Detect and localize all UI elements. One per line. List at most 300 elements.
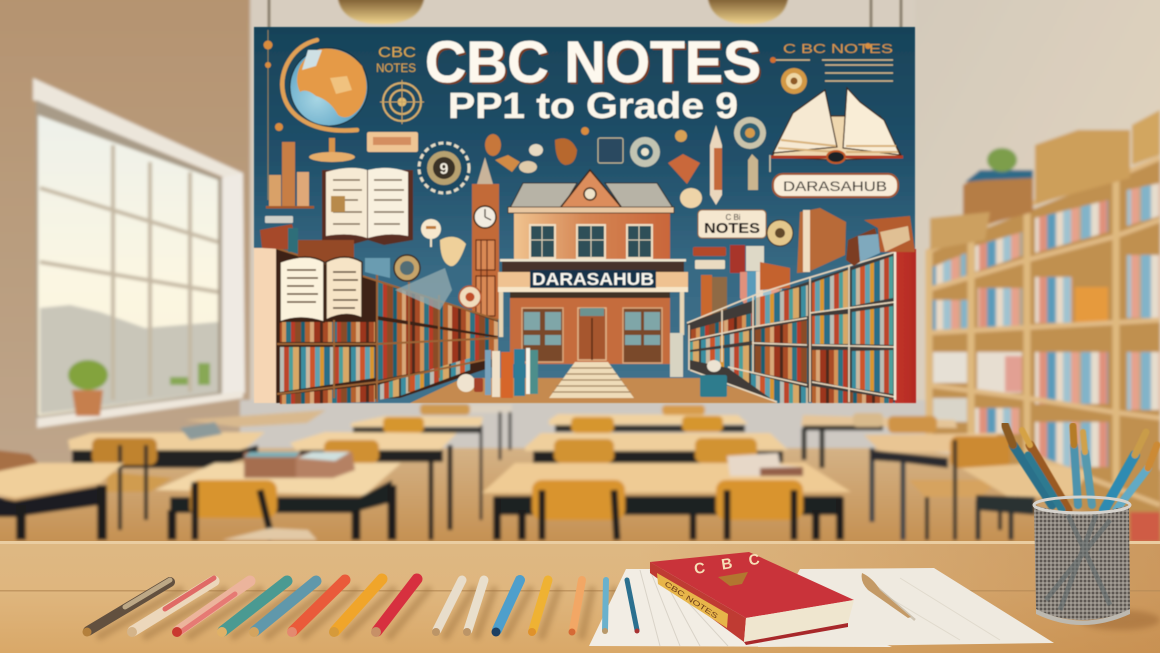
brush blue B — [1085, 452, 1092, 505]
label: notes sign: C Bi — [725, 213, 741, 222]
table groove — [0, 590, 1160, 592]
desk left — [68, 432, 265, 450]
title line two shadow: PP1 to Grade 9 — [449, 86, 739, 127]
cover title: CBC — [693, 551, 761, 578]
door — [578, 308, 606, 360]
chair — [324, 440, 379, 463]
rule end dot — [770, 57, 776, 63]
icon: globe — [282, 40, 368, 162]
shelf back — [927, 158, 1160, 545]
title line two: PP1 to Grade 9 — [448, 85, 738, 126]
window frame — [36, 100, 222, 424]
books on left desk — [0, 450, 38, 472]
apron — [0, 486, 100, 517]
building — [498, 170, 688, 398]
ceiling lamps — [269, 0, 901, 30]
icon: small item on floor — [457, 374, 483, 392]
row 2 right — [1035, 277, 1072, 323]
shelf books upper far — [1127, 183, 1160, 226]
door centre line — [591, 318, 593, 360]
book stack centre — [485, 348, 538, 398]
hanging wires — [269, 0, 901, 30]
pen 12 — [528, 580, 548, 636]
right sheet lines — [868, 578, 1000, 640]
title — [425, 30, 763, 127]
pen 15 — [627, 580, 640, 634]
chair seat — [222, 528, 317, 540]
balcony base — [498, 287, 688, 292]
cornice — [508, 207, 674, 213]
icon: target — [380, 80, 424, 124]
globe stem — [329, 138, 335, 156]
case body — [276, 248, 498, 403]
heading rule lines — [772, 60, 893, 81]
columns — [501, 292, 682, 337]
label: darasahub banner: DARASAHUB — [783, 178, 887, 194]
cup rim — [1034, 497, 1130, 513]
red book — [650, 551, 854, 645]
mesh cup body — [1034, 505, 1130, 620]
book stack — [244, 452, 300, 478]
books right upper far — [852, 256, 893, 306]
tower panels — [476, 240, 495, 316]
brush blue A tip — [1073, 426, 1074, 445]
title shadow: CBC NOTES — [427, 32, 763, 97]
icon: tag label — [367, 132, 418, 152]
icon: coin — [734, 117, 766, 149]
apron — [300, 450, 443, 462]
paper sheets — [589, 568, 1054, 647]
brush right B — [1116, 468, 1148, 510]
books mid upper — [755, 285, 808, 326]
globe sphere — [290, 48, 368, 126]
chair legs — [927, 440, 1000, 540]
lower back wall — [240, 400, 940, 460]
label: darasahub banner — [773, 174, 898, 197]
window glass — [38, 115, 218, 416]
back cover edge — [744, 623, 848, 645]
pen 4 — [217, 581, 287, 637]
books rear shelf — [378, 280, 498, 336]
pencil shadow — [866, 578, 915, 620]
orange box — [1075, 287, 1108, 322]
apron — [72, 445, 258, 468]
desk centre — [525, 433, 788, 451]
icon: open book top left — [322, 168, 413, 245]
brush B tip — [1083, 432, 1085, 452]
apron — [533, 451, 783, 463]
book pages — [803, 210, 810, 272]
window bars — [530, 225, 652, 258]
pens on table — [82, 578, 640, 637]
desk apron — [353, 427, 481, 433]
pen shadows — [100, 590, 644, 636]
right bookshelf — [927, 110, 1160, 545]
books mid right — [378, 320, 498, 380]
front table — [0, 541, 1160, 653]
row 3 centre — [977, 352, 1022, 393]
dotted deco left — [267, 30, 269, 200]
books right mid far — [852, 306, 893, 345]
holder shadow — [1080, 610, 1160, 630]
book cover — [650, 552, 854, 618]
row 4 right — [1035, 422, 1108, 467]
book pages — [744, 600, 854, 642]
books behind right case — [701, 245, 790, 322]
big books above right case — [797, 208, 915, 273]
table edge highlight — [0, 541, 1160, 544]
banner plate — [530, 270, 656, 288]
chair — [682, 416, 723, 432]
continent highlight — [330, 76, 352, 94]
shelf books top left — [930, 253, 966, 287]
icon: clock tower — [472, 157, 499, 319]
red side panel — [895, 249, 916, 403]
poster background — [254, 27, 915, 403]
deco dots — [264, 40, 871, 135]
desk row 3 — [351, 416, 483, 427]
brush right B tip — [1148, 445, 1157, 468]
pen 9 — [432, 580, 462, 636]
red cover — [771, 156, 903, 158]
left roof — [510, 183, 577, 208]
spire — [477, 157, 493, 184]
label: notes sign — [698, 210, 766, 238]
books row left top — [690, 313, 752, 340]
blue book — [858, 234, 880, 262]
upper windows — [530, 225, 652, 258]
books upper left — [280, 322, 375, 342]
chair — [695, 438, 757, 463]
row 2 far — [1127, 255, 1160, 318]
books bottom — [812, 386, 893, 403]
brush left tip — [1005, 425, 1013, 445]
middle row desks — [68, 422, 1010, 540]
icon: pen — [710, 125, 722, 205]
icon: coin beside sign — [767, 220, 793, 246]
icon: numbered medal: 9 — [440, 161, 449, 178]
pile top — [864, 216, 915, 252]
chair — [571, 417, 614, 433]
pen 5 — [249, 581, 316, 637]
book pile — [963, 170, 1033, 230]
books right mid — [812, 314, 848, 344]
chair back — [190, 480, 277, 518]
globe base — [309, 152, 355, 162]
notebook pencil — [862, 573, 915, 620]
ground windows — [522, 308, 662, 363]
tall book block — [797, 208, 846, 273]
book on desk — [180, 422, 222, 440]
small basket — [700, 375, 727, 397]
bottom books far right — [1130, 512, 1160, 542]
legs — [978, 500, 1011, 540]
pen 14 — [602, 580, 608, 634]
right roof — [605, 183, 673, 208]
desk back centre — [549, 414, 748, 425]
pen 10 — [463, 580, 484, 636]
brush teal left — [1013, 445, 1052, 505]
icon: badges — [394, 219, 481, 308]
boxes on far left — [930, 212, 990, 250]
label: small cbc notes left: NOTES — [376, 61, 416, 75]
storage boxes — [1035, 130, 1130, 205]
door top panel — [580, 308, 604, 316]
book spine — [650, 562, 746, 642]
label: small cbc notes left: CBC — [378, 44, 416, 61]
apron — [170, 480, 392, 513]
desk back right — [801, 415, 957, 428]
boards — [687, 252, 895, 402]
chair seat — [909, 480, 1000, 497]
lamp left — [338, 0, 424, 24]
right bookcase — [670, 249, 916, 403]
spine knot — [827, 151, 845, 163]
window — [33, 78, 245, 428]
chair legs — [542, 490, 617, 540]
spine text: CBC NOTES — [663, 581, 719, 621]
desk front centre — [482, 463, 851, 493]
boards — [927, 158, 1160, 505]
icon: numbered medal — [419, 143, 469, 193]
desk centre-left — [290, 432, 457, 450]
desk far left — [185, 410, 326, 427]
books lower centre — [755, 346, 808, 383]
left lined sheet — [589, 569, 892, 647]
row 3 red accent — [1005, 356, 1022, 392]
pen 11 — [492, 580, 520, 636]
page bands — [778, 140, 898, 152]
brush right A — [1104, 455, 1135, 510]
shelf boards — [276, 248, 498, 402]
brushes back — [1005, 425, 1157, 510]
icon: big open book right — [771, 88, 903, 163]
left wall — [0, 0, 260, 490]
chair — [383, 417, 424, 433]
books right upper — [812, 270, 848, 312]
desk front left top — [0, 463, 124, 498]
icon: spiral coin top right — [781, 68, 807, 94]
balcony top — [500, 259, 686, 262]
right wall — [915, 0, 1160, 470]
shelf books top centre — [975, 232, 1022, 272]
icon: note card — [598, 138, 623, 163]
books floor wedge — [728, 368, 808, 403]
pen 1 — [82, 580, 170, 636]
globe ring stand — [282, 40, 357, 131]
apron — [870, 450, 948, 468]
right sheet — [758, 568, 1054, 647]
icon: diamond shield — [668, 154, 700, 184]
chair legs — [195, 482, 272, 540]
uprights — [929, 176, 1116, 500]
row 4 left — [933, 398, 967, 422]
step lines — [552, 368, 631, 392]
books right low far — [852, 350, 893, 394]
row 3 right — [1035, 352, 1108, 404]
pile — [846, 228, 880, 266]
hills outside — [40, 305, 218, 414]
window sill — [37, 391, 243, 428]
tags — [693, 247, 726, 269]
pencil body — [862, 573, 911, 618]
row 4 centre — [975, 408, 1020, 434]
books right low — [812, 350, 848, 388]
chair — [554, 439, 614, 463]
chair — [662, 405, 705, 415]
icon: small shell — [680, 188, 702, 208]
pen 3 — [172, 581, 250, 637]
icon: bar chart books — [266, 142, 314, 208]
books mid centre — [755, 320, 808, 344]
back chair — [420, 404, 470, 415]
book pile centre — [727, 453, 803, 476]
apron — [555, 425, 745, 432]
continents — [297, 49, 367, 117]
book top 2 — [298, 452, 350, 461]
desk right 2 — [961, 463, 1090, 497]
back row desks — [185, 404, 957, 520]
chair — [888, 416, 937, 433]
label: small cbc notes right: C BC NOTES — [783, 42, 893, 56]
brush blue A — [1074, 445, 1078, 505]
chair — [532, 480, 625, 520]
plant leaves — [68, 360, 108, 390]
table right shading — [0, 541, 1160, 653]
chair seat — [107, 472, 172, 492]
apron — [976, 495, 1035, 515]
chair legs — [693, 490, 794, 540]
boxes far right — [1132, 110, 1160, 165]
icon: open book on left case — [280, 257, 362, 322]
shelf books top right — [1035, 200, 1108, 253]
base cover — [772, 116, 902, 160]
pen 2 — [127, 578, 214, 637]
gable window — [584, 188, 596, 200]
lamp right — [708, 0, 788, 24]
pen 6 — [287, 580, 345, 637]
books bottom — [280, 385, 375, 404]
pen 7 — [329, 579, 382, 637]
gable — [560, 170, 622, 208]
window panes — [524, 312, 660, 345]
books lower left — [690, 345, 752, 380]
chair faint — [853, 413, 883, 427]
legs — [497, 497, 840, 540]
desk back centre left — [470, 404, 512, 413]
brush gold — [1022, 430, 1030, 445]
front desks — [0, 450, 1090, 540]
icon: small circle — [675, 130, 687, 142]
label: small cbc notes left — [376, 44, 416, 75]
tower body — [472, 184, 499, 319]
icons: decoration row — [485, 134, 770, 190]
icon: concentric coin mid — [630, 137, 660, 167]
pen 8 — [371, 579, 417, 637]
cream book — [880, 226, 910, 252]
label: small cbc notes right — [770, 42, 893, 81]
window side reveal — [220, 173, 245, 396]
title line one: CBC NOTES — [425, 30, 761, 95]
basket top — [707, 360, 721, 372]
legs — [21, 485, 102, 540]
shelf plant — [987, 148, 1017, 172]
cup base rim — [1036, 609, 1130, 625]
books in building yard — [670, 333, 683, 377]
icon: books atop left case — [260, 216, 452, 310]
plant pot — [72, 390, 103, 416]
globe map patch — [302, 50, 322, 70]
steps — [549, 362, 634, 398]
apron and legs — [803, 428, 883, 468]
label: notes sign: NOTES — [704, 220, 760, 237]
clock hands — [485, 209, 491, 220]
pencil cup — [1005, 425, 1160, 630]
chair back — [92, 438, 157, 465]
upper walls — [514, 210, 670, 262]
blue book on pile — [965, 170, 1033, 182]
side edge — [894, 250, 896, 400]
books bottom right — [378, 358, 470, 400]
left page — [773, 90, 837, 153]
book pile lower — [760, 467, 803, 476]
ground floor wall — [510, 292, 670, 364]
brush brown — [1030, 445, 1068, 510]
shelf books row 3 — [933, 352, 967, 383]
brush right A tip — [1135, 432, 1146, 455]
desk right — [864, 433, 1000, 452]
small plants — [170, 363, 210, 385]
right page — [843, 88, 900, 155]
legs — [431, 445, 450, 540]
balcony ledge — [498, 272, 688, 289]
chair — [716, 480, 803, 520]
row 2 centre — [978, 288, 1022, 327]
window top reveal — [33, 78, 243, 185]
floor — [0, 448, 1160, 560]
apron and legs — [872, 448, 903, 540]
tabletop — [0, 541, 1160, 653]
sheet lines — [640, 570, 728, 646]
spine label — [657, 573, 728, 628]
chair back — [950, 436, 1010, 468]
books mid — [690, 330, 752, 350]
desk leg — [481, 412, 510, 520]
crossed brush shafts — [1046, 515, 1110, 610]
desk front centre-left — [155, 463, 401, 495]
plaza floor — [410, 378, 790, 403]
pen 13 — [568, 580, 582, 636]
balcony rail — [502, 260, 684, 272]
label: darasahub sign: DARASAHUB — [532, 269, 654, 289]
books lower left — [280, 347, 375, 392]
clock face — [474, 206, 496, 228]
brush mid teal — [1028, 455, 1062, 510]
shelf books row 2 — [930, 300, 968, 330]
back wall — [250, 0, 940, 470]
row 3 far — [1127, 352, 1160, 410]
cover emblem — [718, 572, 748, 586]
poster — [254, 27, 916, 404]
apron — [494, 496, 842, 515]
chair legs — [120, 445, 146, 530]
case body — [687, 252, 895, 402]
book top — [244, 452, 300, 457]
awning — [510, 292, 670, 298]
left bookcase — [254, 248, 498, 404]
book stack 2 — [296, 452, 355, 478]
side panel — [254, 248, 276, 403]
